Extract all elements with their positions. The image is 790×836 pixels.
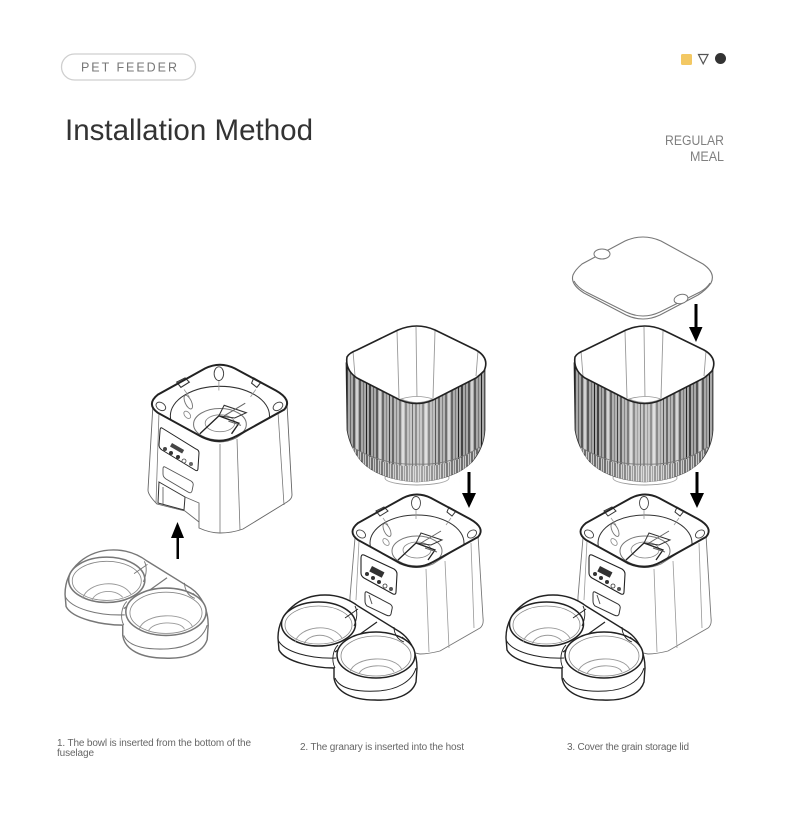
host body <box>577 535 711 654</box>
host top opening <box>580 494 709 571</box>
bowl <box>278 595 417 700</box>
arrow: lid down onto granary <box>689 304 702 342</box>
caption 1: fuselage <box>57 748 94 759</box>
granary <box>574 326 714 485</box>
storage lid <box>572 237 712 319</box>
step 2 illustration: granary above host with bowl <box>278 326 486 700</box>
step 1 illustration: host above bowl <box>65 365 292 658</box>
arrow: granary down into host <box>462 472 476 508</box>
bowl <box>506 595 645 700</box>
caption 3: 3. Cover the grain storage lid <box>567 742 689 753</box>
caption 1: 1. The bowl is inserted from the bottom of the <box>57 738 251 749</box>
caption 2: 2. The granary is inserted into the host <box>300 742 464 753</box>
arrow: up into host <box>171 522 184 559</box>
tag pill: PET FEEDER: PET FEEDER <box>81 60 177 74</box>
caption 1 <box>57 738 251 759</box>
granary <box>346 326 486 485</box>
tag pill: PET FEEDER <box>62 54 196 80</box>
arrow: granary down into host <box>690 472 704 508</box>
host top opening <box>352 494 481 571</box>
title: Installation Method <box>65 114 313 147</box>
icon row: square, triangle, circle <box>681 53 726 65</box>
host top opening <box>152 365 287 445</box>
step 3 illustration: lid, granary, host with bowl <box>506 237 714 700</box>
side label: REGULAR MEAL: REGULAR <box>665 133 724 148</box>
bowl <box>65 550 208 658</box>
host body with bowl slot <box>148 404 292 533</box>
side label: REGULAR MEAL: MEAL <box>690 149 724 164</box>
host body <box>349 535 483 654</box>
side label: REGULAR MEAL <box>665 133 724 164</box>
